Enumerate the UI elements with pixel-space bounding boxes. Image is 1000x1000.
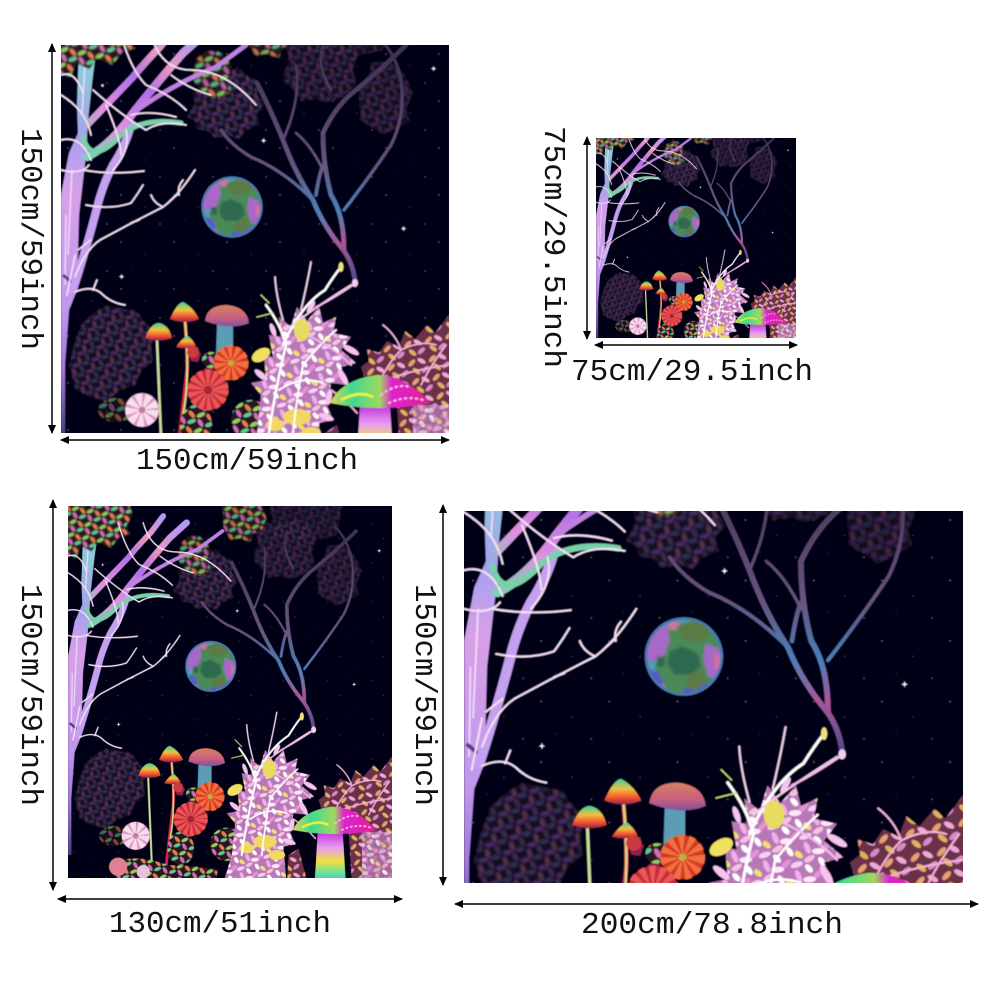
height label: 150cm/59inch <box>12 584 47 806</box>
panel: 75cm by 75cm tapestry <box>535 117 813 390</box>
arrow: width 75cm <box>595 344 797 346</box>
panel: 130cm by 150cm tapestry <box>12 498 402 942</box>
panel: 150cm by 150cm tapestry <box>12 5 458 479</box>
tapestry artwork: 200 by 150 <box>464 511 963 883</box>
tapestry artwork: 130 by 150 <box>68 506 392 878</box>
width label: 200cm/78.8inch <box>581 908 843 943</box>
arrow: height 150cm <box>442 505 444 885</box>
tapestry artwork: 150 by 150 <box>61 45 449 433</box>
height label: 150cm/59inch <box>12 128 47 350</box>
width label: 75cm/29.5inch <box>571 355 813 390</box>
arrow: width 200cm <box>455 903 978 905</box>
arrow: height 75cm <box>586 137 588 339</box>
panel: 200cm by 150cm tapestry <box>406 396 978 1000</box>
width label: 130cm/51inch <box>109 907 331 942</box>
arrow: width 130cm <box>58 898 402 900</box>
tapestry artwork: 75 by 75 <box>596 138 796 338</box>
height label: 150cm/59inch <box>406 584 441 806</box>
width label: 150cm/59inch <box>136 444 358 479</box>
arrow: width 150cm <box>61 439 449 441</box>
height label: 75cm/29.5inch <box>535 126 570 368</box>
arrow: height 150cm <box>52 500 54 890</box>
arrow: height 150cm <box>51 44 53 433</box>
